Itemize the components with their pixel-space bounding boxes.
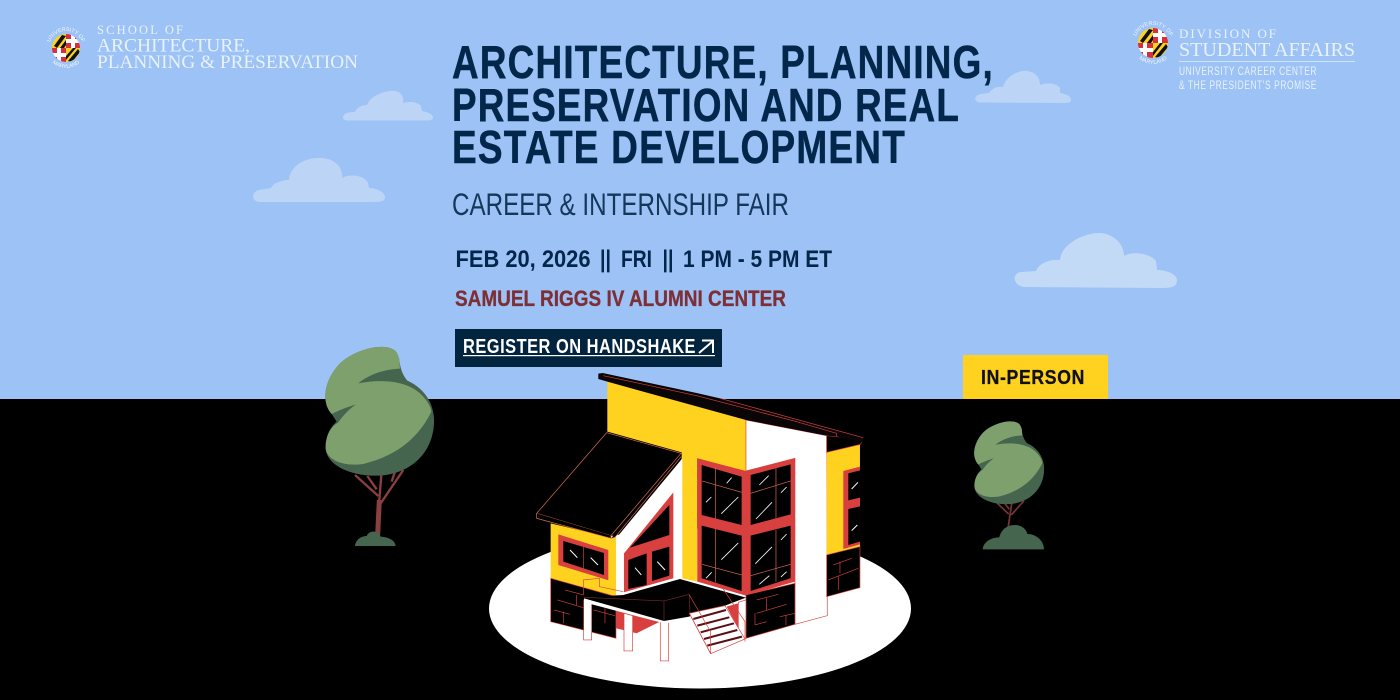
right roof underside — [827, 436, 863, 452]
cloud: top right — [975, 71, 1071, 103]
house illustration — [537, 373, 863, 661]
deck beam — [584, 598, 689, 623]
date and time: FRI — [621, 246, 652, 273]
black ground — [0, 399, 1400, 700]
right wing window — [843, 467, 860, 549]
red area under deck — [616, 610, 660, 633]
cloud: middle left — [253, 158, 385, 202]
left white gable wall — [616, 458, 682, 596]
white tower wall — [746, 420, 827, 624]
corner window frame — [697, 458, 795, 596]
white ground ellipse — [489, 528, 911, 688]
gable window — [624, 492, 673, 592]
main yellow wall — [607, 380, 747, 582]
right wing bricks — [827, 547, 860, 597]
in-person badge — [963, 355, 1108, 399]
logo wordmark, right — [1179, 26, 1355, 92]
date and time: 1 PM - 5 PM ET — [683, 246, 832, 273]
logo wordmark, left: SCHOOL OF — [97, 23, 183, 37]
logo wordmark, left: PLANNING & PRESERVATION — [97, 52, 358, 73]
icon: external link arrow — [699, 340, 713, 353]
date and time: || — [600, 246, 611, 273]
right yellow wing — [827, 444, 860, 555]
logo wordmark, right: DIVISION OF — [1179, 26, 1276, 41]
university seal, left: UNIVERSITY OF — [46, 27, 86, 42]
left lower roof — [537, 433, 681, 536]
tree: left — [325, 347, 434, 546]
university seal, right: MARYLAND — [1139, 56, 1166, 64]
logo: School of Architecture, Planning & Preservation — [46, 23, 358, 73]
university seal, right — [1133, 21, 1174, 64]
logo wordmark, right: & THE PRESIDENT'S PROMISE — [1179, 80, 1317, 92]
venue: SAMUEL RIGGS IV ALUMNI CENTER — [455, 286, 786, 311]
left yellow wall — [551, 523, 616, 597]
date and time: || — [662, 246, 674, 273]
cloud: lower right — [1015, 233, 1177, 288]
lower right bricks — [746, 583, 795, 638]
title: PRESERVATION AND REAL — [452, 79, 960, 131]
subtitle: CAREER & INTERNSHIP FAIR — [452, 186, 789, 222]
stairs — [689, 595, 745, 654]
logo: Division of Student Affairs — [1133, 21, 1355, 92]
tree: right — [974, 421, 1044, 549]
logo wordmark, left — [97, 23, 358, 73]
main shed roof — [598, 373, 863, 442]
logo wordmark, right: UNIVERSITY CAREER CENTER — [1179, 66, 1317, 78]
university seal, left: MARYLAND — [52, 60, 79, 68]
in-person badge: IN-PERSON — [981, 367, 1085, 389]
left window — [558, 534, 608, 580]
title: ARCHITECTURE, PLANNING, — [452, 36, 994, 88]
university seal, left — [46, 27, 86, 68]
lower left bricks — [551, 578, 616, 638]
title — [452, 36, 994, 173]
railing frame — [583, 578, 745, 642]
university seal, right: UNIVERSITY OF — [1133, 21, 1174, 36]
logo wordmark, right: STUDENT AFFAIRS — [1179, 39, 1355, 61]
logo wordmark, left: ARCHITECTURE, — [97, 36, 250, 56]
register button: REGISTER ON HANDSHAKE — [463, 336, 696, 358]
deck platform — [584, 579, 746, 621]
deck posts — [584, 600, 746, 661]
date and time — [456, 246, 832, 273]
cloud: top centre-left — [343, 91, 433, 120]
sky background — [0, 0, 1400, 400]
title: ESTATE DEVELOPMENT — [452, 121, 906, 173]
register button — [455, 329, 722, 367]
date and time: FEB 20, 2026 — [456, 246, 590, 273]
